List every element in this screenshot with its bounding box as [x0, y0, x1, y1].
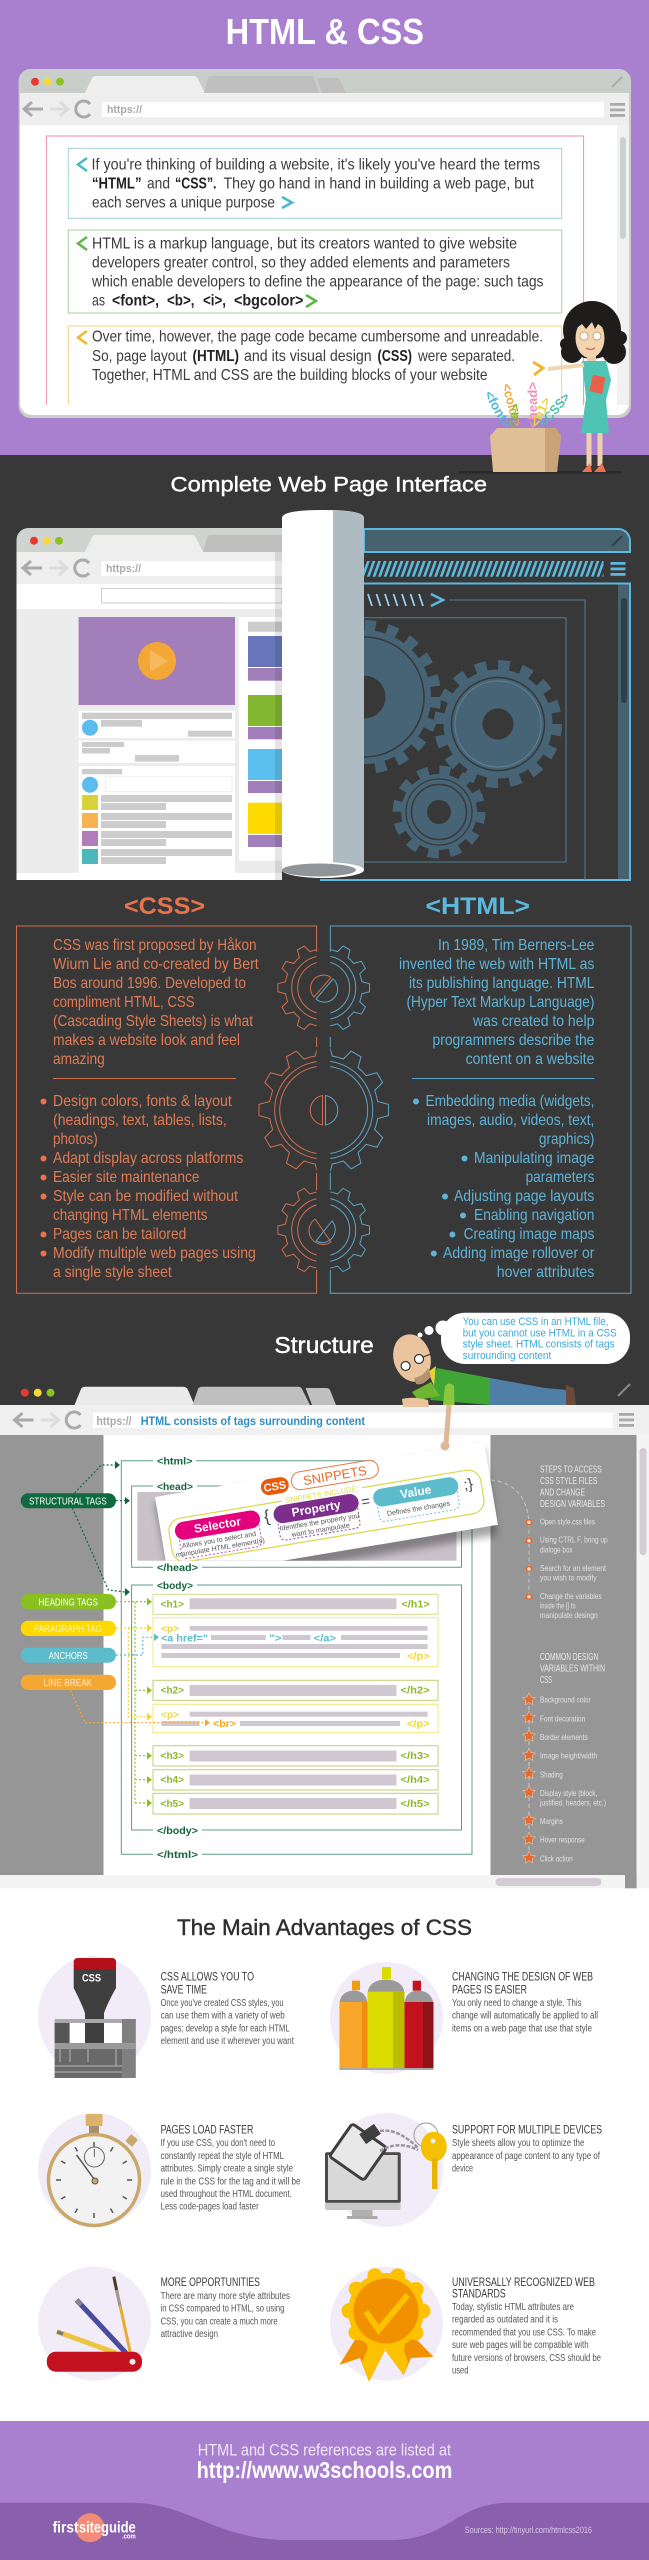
tag pill: heading tags: HEADING TAGS [38, 1597, 98, 1608]
illustration: woman with box of tags: <color> [499, 382, 525, 429]
panel: web standards [330, 2267, 601, 2382]
panel: more opportunities: There are many more style attributes [161, 2291, 290, 2302]
text box: separation: (CSS) [378, 348, 412, 365]
heading rows: </h4> [400, 1774, 430, 1786]
panel: CSS description: (headings, text, tables, lists, [53, 1112, 227, 1129]
diagram: html document tree: </html> [157, 1849, 198, 1861]
sidebar: common design variables: COMMON DESIGN [540, 1651, 598, 1663]
panel: web standards: Today, stylistic HTML attributes are [452, 2302, 574, 2313]
tag pill: structural tags: STRUCTURAL TAGS [29, 1496, 107, 1508]
panel: rendered browser view [16, 528, 282, 880]
sidebar: common design variables: Background color [540, 1695, 591, 1705]
sidebar: common design variables: Click action [540, 1853, 573, 1863]
diagram: html document tree: <head> [157, 1481, 193, 1493]
panel: HTML description: content on a website [466, 1051, 594, 1068]
heading rows: <h3> [161, 1750, 184, 1762]
gear large [292, 626, 436, 768]
icon: stamp [38, 1956, 151, 2078]
sidebar: common design variables: VARIABLES WITHIN [540, 1662, 605, 1674]
panel: changing design: change will automatically be applied to all [452, 2011, 598, 2022]
panel: save time: element and use it wherever you want [161, 2036, 294, 2047]
panel: HTML description: In 1989, Tim Berners-Lee [438, 937, 594, 954]
panel: CSS description: (Cascading Style Sheets) is what [53, 1013, 253, 1030]
reference url: http://www.w3schools.com [197, 2457, 452, 2483]
tag pill: heading tags [21, 1594, 116, 1609]
panel: HTML description: was created to help [472, 1013, 594, 1030]
heading: CSS: <CSS> [124, 893, 205, 920]
paragraph block one: <a href=" [161, 1632, 208, 1644]
heading rows: </h3> [400, 1750, 430, 1762]
panel: multiple devices [325, 2113, 602, 2227]
panel: CSS description: Pages can be tailored [53, 1226, 186, 1243]
text box: separation: Over time, however, the page code became cumbersome and unreadable. [92, 329, 543, 346]
heading rows: <h2> [161, 1684, 184, 1696]
logo: firstsiteguide: guide [101, 2520, 136, 2537]
connectors: arrowheads [115, 1461, 210, 1807]
heading rows: </h5> [400, 1798, 430, 1810]
panel: CSS description: Design colors, fonts & layout [53, 1093, 232, 1110]
sidebar: common design variables: Font decoration [540, 1713, 585, 1723]
panel: changing design: You only need to change a style. This [452, 1998, 582, 2009]
sidebar: steps to access css: AND CHANGE [540, 1486, 585, 1498]
video placeholder [79, 617, 235, 705]
text box: intro: If you're thinking of building a website, it's likely you've heard the terms [92, 156, 540, 174]
text box: intro: “HTML” [92, 175, 142, 192]
title: HTML & CSS [226, 11, 424, 52]
text box: markup language: developers greater control, so they added elements and parameters [92, 255, 510, 272]
panel: more opportunities [38, 2267, 290, 2381]
panel: CSS description: Adapt display across platforms [53, 1150, 243, 1167]
paragraph block two: </p> [407, 1718, 430, 1730]
logo: firstsiteguide: first [53, 2520, 79, 2537]
sidebar: steps to access css: you wish to modify [540, 1572, 597, 1582]
card: css snippets [152, 1446, 500, 1561]
card: css snippets: SNIPPETS INCLUDE: [285, 1484, 359, 1505]
callout: thought bubble [418, 1313, 630, 1364]
text box: markup language [68, 230, 562, 313]
paragraph block one: <p> [161, 1623, 179, 1635]
diagram: html document tree: <html> [157, 1456, 192, 1468]
card: css snippets: ;} [462, 1475, 474, 1494]
callout: thought bubble: You can use CSS in an HTML file, [463, 1316, 608, 1328]
panel: web standards: used [452, 2366, 468, 2376]
icon: spray cans [330, 1962, 443, 2074]
panel: web standards: UNIVERSALLY RECOGNIZED WEB [452, 2277, 595, 2289]
tag pill: paragraph tag [21, 1621, 116, 1636]
panel: more opportunities: in CSS compared to HTML, so using [161, 2304, 284, 2315]
panel: changing design: PAGES IS EASIER [452, 1984, 527, 1996]
sidebar: steps to access css: CSS STYLE FILES [540, 1475, 597, 1487]
panel: HTML description: parameters [526, 1169, 594, 1186]
icon: pocket knife with pens [38, 2267, 151, 2381]
text box: markup language: <bgcolor> [234, 292, 303, 309]
text box: separation: (HTML) [192, 348, 239, 365]
card: css snippets: Defines the changes [387, 1500, 451, 1518]
paragraph block one: </p> [407, 1650, 430, 1662]
panel: rendered browser view: https:// [106, 563, 141, 575]
text box: separation: Together, HTML and CSS are the building blocks of your website [92, 367, 488, 384]
panel: CSS description: changing HTML elements [53, 1207, 207, 1224]
heading rows: <h5> [161, 1798, 184, 1810]
card: css snippets: Allows you to select and [181, 1531, 257, 1550]
text box: separation [68, 326, 562, 405]
panel: CSS description: CSS was first proposed by Håkon [53, 936, 257, 954]
card: css snippets: Value [399, 1482, 433, 1501]
panel: web standards: STANDARDS [452, 2288, 506, 2300]
sidebar: steps to access css: Using CTRL F, bring up [540, 1535, 608, 1545]
panel: HTML description: graphics) [539, 1131, 594, 1148]
reference line: HTML and CSS references are listed at [198, 2441, 451, 2460]
panel: pages load faster [38, 2113, 301, 2227]
text box: markup language: HTML is a markup language, but its creators wanted to give website [92, 235, 517, 252]
panel: HTML description: Enabling navigation [474, 1207, 594, 1224]
connectors: dotted arrows [70, 1465, 204, 1803]
text box: intro: “CSS”. [175, 175, 216, 192]
illustration: woman with box of tags [459, 301, 627, 474]
heading rows: </h2> [400, 1684, 430, 1696]
text box: markup language: <font>, [112, 292, 159, 309]
gear small [397, 770, 481, 854]
panel: CSS description: compliment HTML, CSS [53, 994, 194, 1011]
tag pill: line break [21, 1675, 116, 1690]
section background: purple intro [0, 0, 649, 455]
sidebar: steps to access css [491, 1463, 608, 1620]
section background: dark [0, 455, 649, 1405]
panel: HTML description: programmers describe the [432, 1032, 594, 1049]
panel: CSS description: Bos around 1996. Developed to [53, 975, 246, 992]
panel: more opportunities: MORE OPPORTUNITIES [161, 2277, 260, 2289]
panel: pages load faster: If you use CSS, you don't need to [161, 2138, 275, 2149]
panel: web standards: regarded as outdated and it is [452, 2315, 558, 2326]
illustration: woman with box of tags: <head> [525, 382, 540, 428]
card: css snippets: Identifies the property you [279, 1513, 360, 1533]
panel: web standards: future versions of browsers, CSS should be [452, 2353, 601, 2364]
heading rows: </h1> [402, 1598, 430, 1610]
icon: ribbon badge [330, 2267, 443, 2382]
panel: CSS description: Style can be modified without [53, 1188, 238, 1205]
sidebar: common design variables: Hover response [540, 1835, 585, 1845]
card: css snippets: Property [291, 1498, 342, 1520]
text box: separation: and its visual design [244, 348, 372, 365]
sidebar: steps to access css: dialoge box [540, 1544, 573, 1554]
tag pill: structural tags [21, 1493, 116, 1508]
sidebar: steps to access css: Change the variables [540, 1591, 602, 1601]
callout: thought bubble: but you cannot use HTML in a CSS [463, 1327, 617, 1339]
sidebar thumbnails [239, 617, 282, 861]
text box: intro: each serves a unique purpose [92, 194, 275, 211]
text box: markup language: as [92, 292, 105, 309]
panel: CSS description: Wium Lie and co-created by Bert [53, 956, 259, 973]
card: css snippets: { [262, 1506, 271, 1526]
diagram: html document tree: <body> [157, 1580, 193, 1592]
icon: stamp: CSS [82, 1973, 101, 1985]
heading rows: <h1> [161, 1598, 184, 1610]
panel: changing design: CHANGING THE DESIGN OF WEB [452, 1972, 593, 1984]
tag pill: anchors [21, 1648, 116, 1663]
panel: HTML description: Adjusting page layouts [454, 1188, 594, 1205]
sidebar: common design variables [522, 1651, 606, 1863]
paragraph block one: "> [269, 1632, 282, 1644]
panel: save time: CSS ALLOWS YOU TO [161, 1972, 254, 1984]
panel: CSS description [16, 926, 332, 1294]
paragraph block one [153, 1618, 438, 1667]
sidebar: common design variables: justified, headers, etc.) [539, 1798, 606, 1808]
panel: CSS description: amazing [53, 1051, 105, 1068]
illustration: woman with box of tags: <CSS> [536, 389, 573, 430]
paragraph block two [153, 1704, 438, 1733]
panel: more opportunities: attractive design [161, 2329, 218, 2340]
panel: pages load faster: used throughout the HTML document. [161, 2189, 292, 2200]
sidebar: steps to access css: manipulate desingn [540, 1610, 598, 1620]
gear medium [439, 665, 557, 783]
tag pill: line break: LINE BREAK [44, 1678, 93, 1689]
panel: intro browser window [19, 69, 631, 418]
panel: HTML description: Manipulating image [474, 1150, 594, 1167]
sidebar: steps to access css: STEPS TO ACCESS [540, 1463, 602, 1475]
sidebar: steps to access css: DESIGN VARIABLES [540, 1498, 605, 1510]
panel: save time: can use them with a variety of web [161, 2011, 285, 2022]
panel: pages load faster: constantly repeat the style of HTML [161, 2151, 284, 2162]
panel: CSS description: Easier site maintenance [53, 1169, 200, 1186]
panel: pages load faster: attributes. Simply create a single style [161, 2164, 293, 2175]
panel: HTML description: (Hyper Text Markup Language) [406, 994, 594, 1011]
sidebar: common design variables: CSS [540, 1674, 552, 1686]
text box: separation: So, page layout [92, 348, 187, 365]
panel: save time [38, 1956, 294, 2078]
sidebar: steps to access css: Search for an element [540, 1563, 606, 1573]
panel: structure browser window [0, 1384, 649, 1888]
text box: markup language: <b>, [167, 292, 194, 309]
card: css snippets: Selector [193, 1514, 242, 1536]
card: css snippets: manipulate HTML element(s) [175, 1538, 265, 1559]
panel: HTML description: invented the web with HTML as [399, 956, 594, 973]
panel: changing design [330, 1962, 598, 2074]
tag pill: anchors: ANCHORS [49, 1651, 88, 1662]
panel: save time: Once you've created CSS styles, you [161, 1998, 284, 2009]
logo: firstsiteguide: site [79, 2520, 101, 2537]
panel: multiple devices: SUPPORT FOR MULTIPLE DEVICES [452, 2124, 602, 2136]
text box: intro: They go hand in hand in building a web page, but [224, 175, 534, 192]
sidebar: common design variables: Image height/width [540, 1751, 598, 1761]
panel: changing design: items on a web page that use that style [452, 2023, 592, 2034]
sidebar: common design variables: Margins [540, 1816, 563, 1826]
panel: save time: SAVE TIME [161, 1984, 207, 1996]
panel: blueprint view of browser [292, 529, 630, 880]
logo: firstsiteguide: .com [122, 2534, 136, 2540]
text box: separation: were separated. [417, 348, 515, 365]
heading rows [153, 1594, 438, 1814]
tag pill: paragraph tag: PARAGRAPH TAG [34, 1624, 102, 1635]
card: css snippets: SNIPPETS [302, 1463, 368, 1488]
panel: structure browser window: HTML consists of tags surrounding content [141, 1414, 365, 1428]
panel: structure browser window: https:// [96, 1416, 132, 1428]
panel: pages load faster: Less code-pages load faster [161, 2202, 259, 2213]
logo: firstsiteguide [53, 2513, 136, 2542]
text box: intro [68, 148, 562, 218]
sidebar: steps to access css: inside the {} to [540, 1600, 576, 1610]
panel: multiple devices: device [452, 2164, 473, 2175]
heading: main advantages: The Main Advantages of CSS [177, 1915, 472, 1940]
text box: markup language: which enable developers to define the appearance of the page: such tags [91, 274, 544, 291]
panel: HTML description [315, 926, 632, 1294]
callout: thought bubble: style sheet. HTML consists of tags [463, 1339, 615, 1351]
diagram: html document tree [121, 1456, 472, 1861]
paragraph block one: </a> [314, 1632, 336, 1644]
illustration: woman with box of tags: <a> [504, 402, 523, 429]
illustration: page roll [282, 510, 364, 878]
panel: web standards: sure web pages will be compatible with [452, 2340, 589, 2351]
sidebar: steps to access css: Open style.css files [540, 1516, 595, 1526]
paragraph block two: <p> [161, 1709, 179, 1721]
panel: HTML description: Embedding media (widgets, [426, 1093, 594, 1110]
panel: CSS description: makes a website look and feel [53, 1032, 240, 1049]
heading rows: <h4> [161, 1774, 184, 1786]
panel: HTML description: hover attributes [497, 1264, 594, 1281]
panel: more opportunities: CSS, you can create a much more [161, 2316, 278, 2327]
card: css snippets: want to manipulate [290, 1522, 350, 1539]
heading: HTML: <HTML> [426, 893, 530, 920]
panel: HTML description: images, audio, videos, text, [427, 1112, 594, 1129]
illustration: woman with box of tags: <font> [481, 388, 515, 430]
panel: web standards: recommended that you use CSS. To make [452, 2327, 596, 2338]
sidebar: common design variables: Border elements [540, 1732, 588, 1742]
panel: save time: pages; develop a style for each HTML [161, 2023, 290, 2034]
illustration: woman with box of tags: <h1> [527, 394, 554, 429]
text box: intro: and [147, 175, 170, 192]
panel: multiple devices: Style sheets allow you to optimize the [452, 2138, 585, 2149]
sources: Sources: http://tinyurl.com/htmlcss2016 [465, 2525, 592, 2535]
callout: thought bubble: surrounding content [463, 1350, 551, 1362]
comment cards [79, 711, 235, 873]
panel: CSS description: Modify multiple web pages using [53, 1245, 256, 1262]
sidebar: common design variables: Shading [540, 1769, 563, 1779]
panel: HTML description: Creating image maps [464, 1226, 594, 1243]
panel: multiple devices: appearance of page content to any type of [452, 2151, 600, 2162]
card: css snippets: = [360, 1493, 372, 1511]
panel: HTML description: its publishing language. HTML [409, 975, 594, 992]
card: css snippets: CSS [263, 1479, 287, 1495]
illustration: man lying on browser [388, 1330, 576, 1450]
panel: CSS description: photos) [53, 1131, 98, 1148]
heading: complete web page interface: Complete Web Page Interface [170, 474, 487, 497]
diagram: html document tree: </body> [157, 1825, 198, 1837]
paragraph block two: <br> [213, 1718, 236, 1730]
sidebar: common design variables: Display style (block, [540, 1788, 597, 1798]
panel: pages load faster: PAGES LOAD FASTER [161, 2124, 253, 2136]
panel: CSS description: a single style sheet [53, 1264, 172, 1281]
diagram: html document tree: </head> [157, 1562, 198, 1574]
panel: pages load faster: rule in the CSS for the tag and it will be [161, 2176, 301, 2187]
panel: HTML description: Adding image rollover or [443, 1245, 595, 1262]
heading: structure: Structure [274, 1332, 374, 1358]
icon: devices with key [325, 2113, 447, 2227]
panel: footer [0, 2421, 649, 2560]
icon: stopwatch [38, 2113, 151, 2227]
text box: markup language: <i>, [203, 292, 226, 309]
panel: intro browser window: https:// [107, 104, 142, 116]
